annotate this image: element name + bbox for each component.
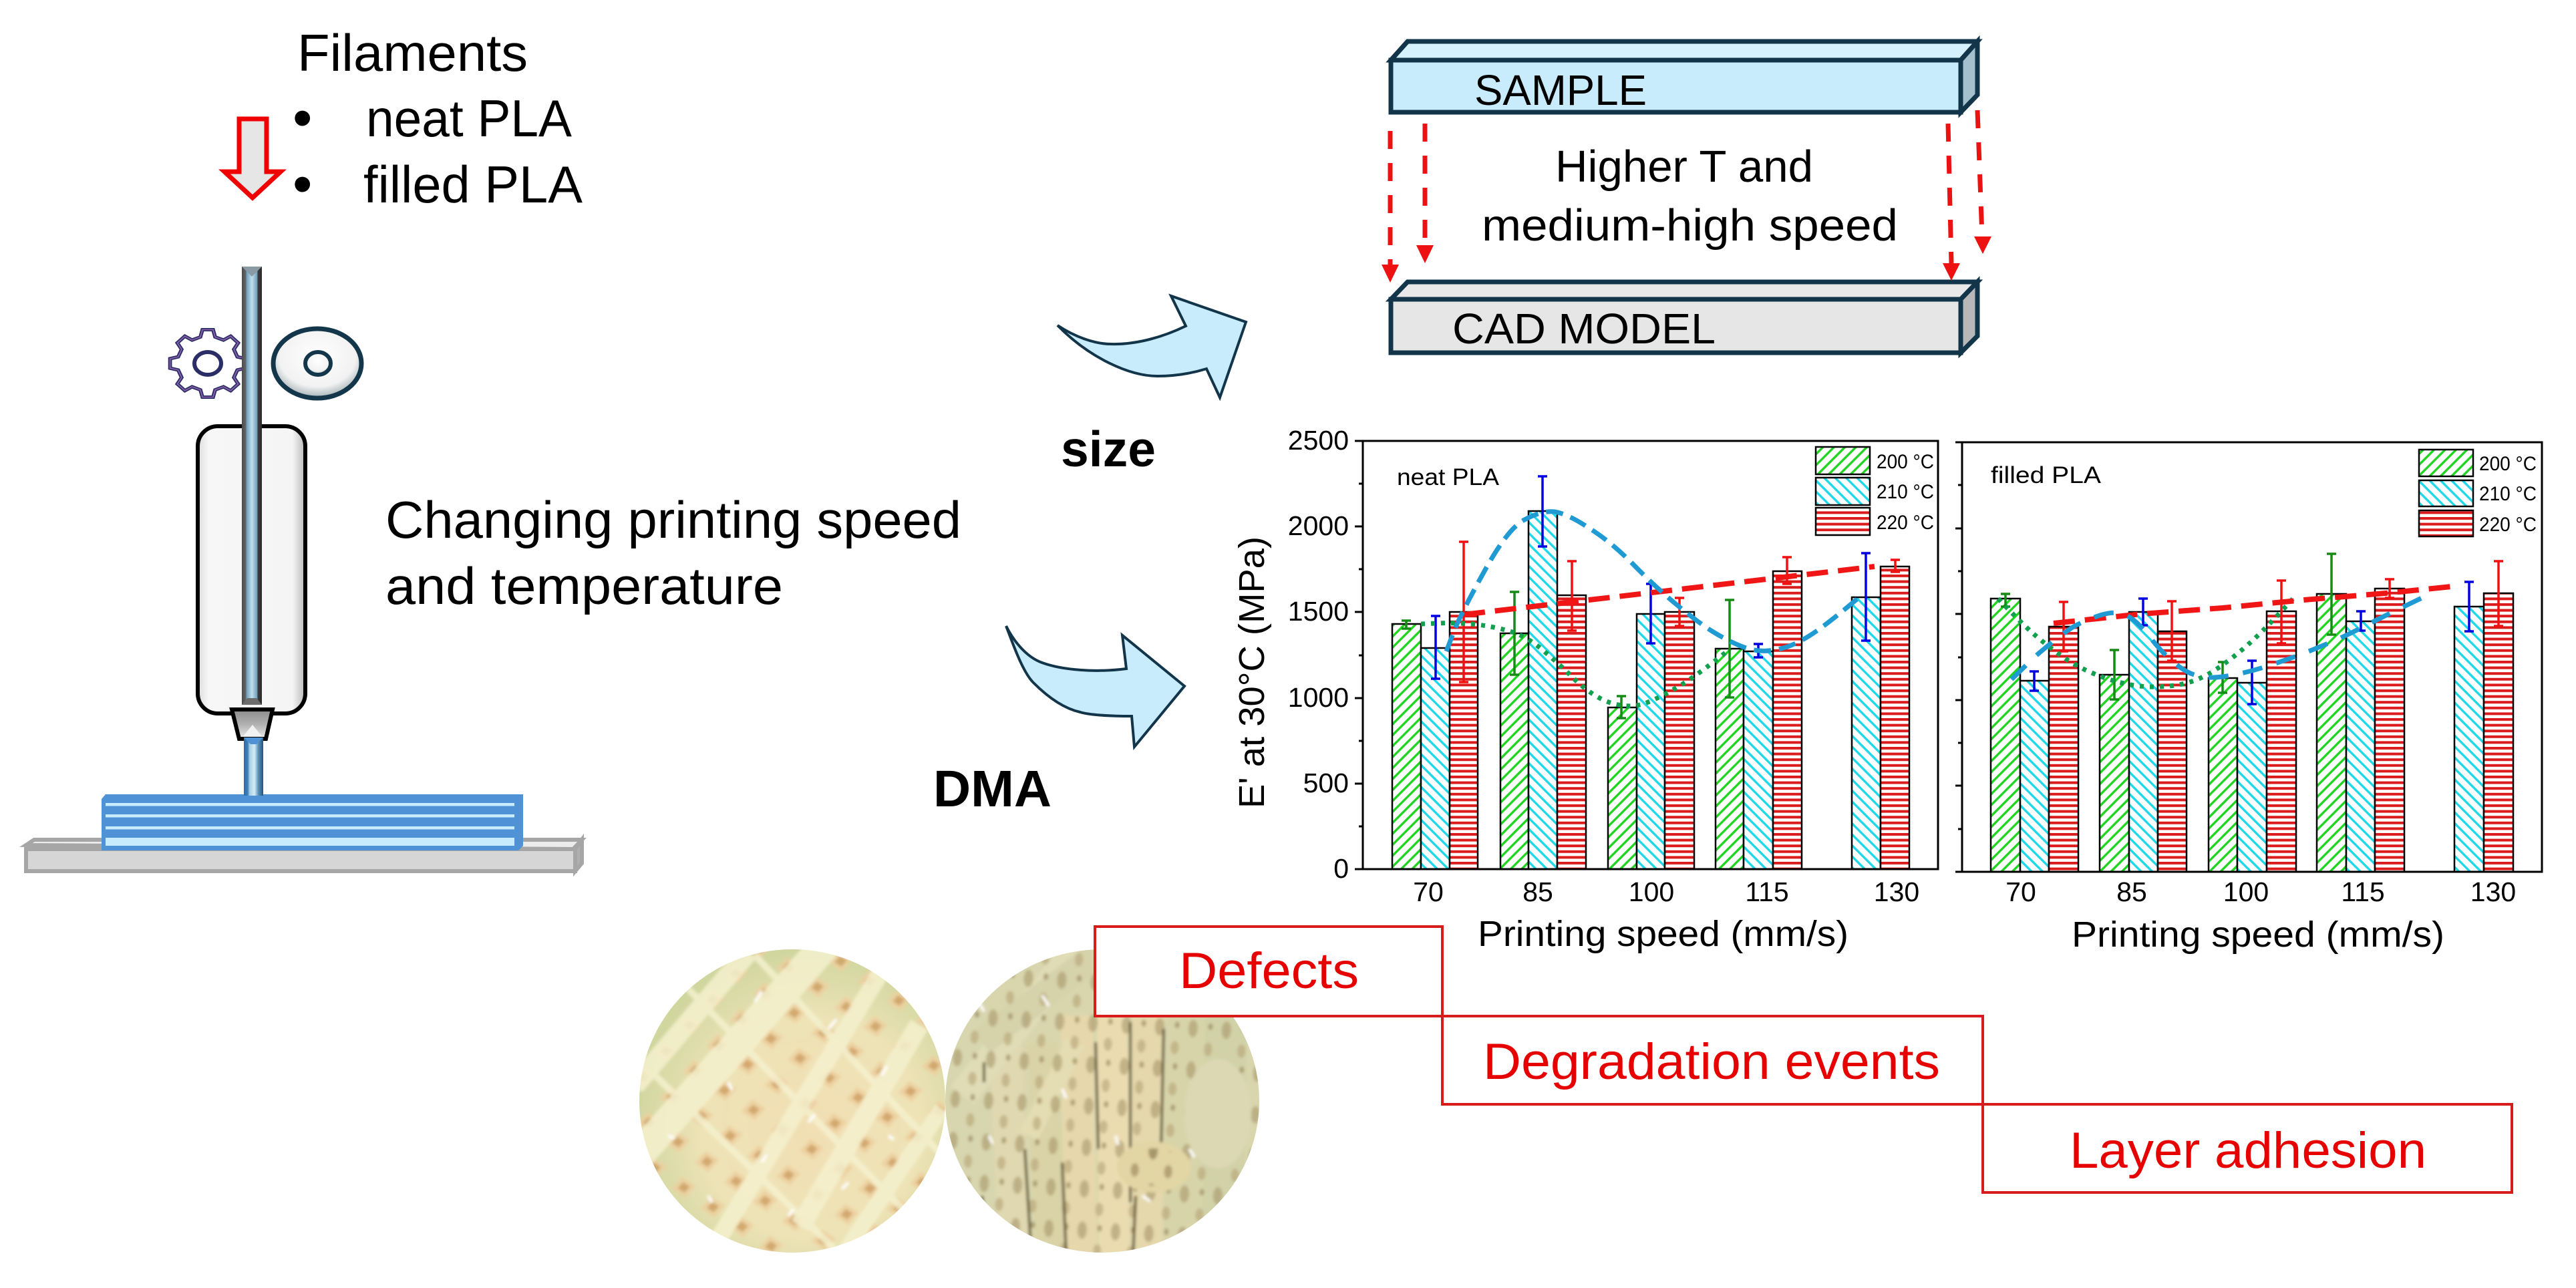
nozzle [232, 709, 273, 739]
x tick labels [1413, 876, 1919, 907]
callout: degradation events [1442, 1016, 1983, 1104]
legend neat PLA: 210 °C [1877, 481, 1934, 503]
process text [385, 490, 961, 615]
curved arrow to size [1058, 296, 1246, 397]
filaments text block: Filaments [297, 23, 528, 82]
filaments text block: • [293, 86, 312, 149]
error bars filled PLA [2001, 554, 2503, 704]
dashed red arrows [1382, 110, 1991, 283]
print bed [26, 840, 582, 871]
error bars neat PLA [1402, 476, 1900, 718]
legend neat PLA [1816, 447, 1934, 535]
red down arrow [224, 119, 281, 198]
x tick labels: 70 [2005, 876, 2036, 907]
y axis title: E' at 30°C (MPa) [1232, 536, 1272, 808]
y tick labels [1288, 425, 1349, 884]
x tick labels: 85 [1522, 876, 1553, 907]
legend neat PLA: 200 °C [1877, 451, 1934, 473]
photo: degraded print with pores [939, 942, 1266, 1263]
bars filled PLA [1991, 589, 2513, 872]
sample box: SAMPLE [1474, 66, 1647, 114]
y tick labels: 1000 [1288, 682, 1349, 713]
CAD model box [1391, 282, 1977, 353]
x tick labels: 115 [1745, 876, 1789, 907]
legend filled PLA: 210 °C [2479, 483, 2537, 505]
trend lines filled PLA [1998, 586, 2458, 687]
x axis title: Printing speed (mm/s) [1478, 914, 1848, 954]
icon: roller [273, 329, 361, 398]
y tick labels: 0 [1333, 853, 1349, 884]
legend filled PLA [2419, 450, 2537, 536]
callout: layer adhesion: Layer adhesion [2070, 1122, 2426, 1179]
printed part: blue layers [102, 794, 523, 850]
size conclusion text: Higher T and [1555, 142, 1813, 192]
label: size: size [1061, 421, 1156, 477]
legend filled PLA: 200 °C [2479, 453, 2537, 475]
label: DMA: DMA [933, 760, 1052, 818]
x tick labels [2005, 876, 2516, 907]
callout: layer adhesion [1983, 1104, 2512, 1192]
y tick labels: 500 [1303, 768, 1349, 798]
x tick labels: 130 [2470, 876, 2516, 907]
legend filled PLA: 220 °C [2479, 514, 2537, 536]
filament rod [242, 267, 262, 705]
legend neat PLA: 220 °C [1877, 512, 1934, 534]
y tick labels: 2000 [1288, 510, 1349, 541]
axes neat PLA [1355, 441, 1938, 869]
process text: Changing printing speed [385, 490, 961, 549]
y tick labels: 1500 [1288, 596, 1349, 627]
CAD model box: CAD MODEL [1452, 305, 1716, 353]
extruder body [198, 426, 305, 713]
size conclusion text [1482, 142, 1898, 251]
photo: regular print lattice [635, 942, 955, 1263]
x tick labels: 100 [1629, 876, 1674, 907]
process text: and temperature [385, 556, 783, 615]
extruded filament [244, 738, 263, 796]
chart: filled PLA [1955, 442, 2542, 955]
curved arrow to DMA [1006, 626, 1184, 747]
callout: defects: Defects [1179, 943, 1359, 999]
filaments text block [293, 23, 583, 215]
icon: gear [170, 330, 245, 397]
y tick labels: 2500 [1288, 425, 1349, 456]
size conclusion text: medium-high speed [1482, 200, 1898, 251]
panel label: neat PLA: neat PLA [1397, 464, 1500, 490]
trend lines neat PLA [1421, 512, 1875, 706]
callout: defects [1095, 927, 1442, 1016]
x tick labels: 130 [1874, 876, 1919, 907]
x tick labels: 85 [2116, 876, 2147, 907]
x tick labels: 70 [1413, 876, 1444, 907]
x axis title: Printing speed (mm/s) [2072, 915, 2444, 955]
filaments text block: filled PLA [363, 155, 583, 214]
sample box [1391, 41, 1977, 114]
x tick labels: 115 [2341, 876, 2385, 907]
x tick labels: 100 [2223, 876, 2269, 907]
filaments text block: • [293, 152, 312, 215]
callout: degradation events: Degradation events [1483, 1033, 1940, 1090]
filaments text block: neat PLA [366, 89, 572, 148]
chart: neat PLA [1288, 425, 1938, 954]
axes filled PLA [1955, 442, 2542, 872]
panel label: filled PLA: filled PLA [1991, 462, 2102, 488]
bars neat PLA [1392, 511, 1909, 869]
